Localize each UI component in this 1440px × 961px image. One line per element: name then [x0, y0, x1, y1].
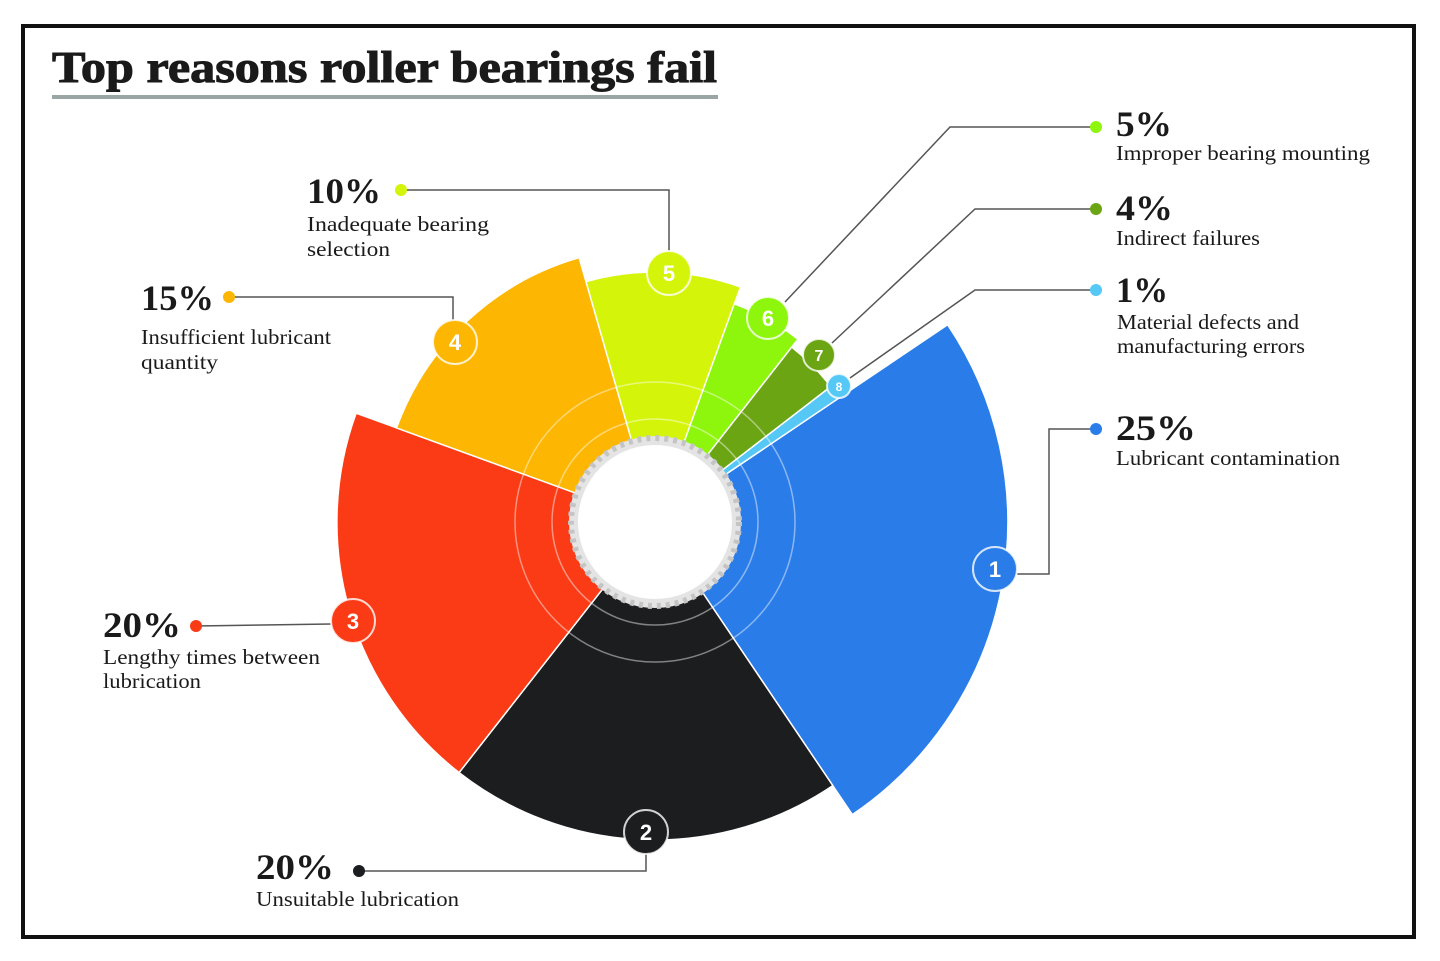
text: 2	[640, 820, 652, 845]
text: 8	[836, 380, 843, 394]
leader lines	[196, 127, 1096, 871]
label 15%: quantity	[141, 350, 219, 374]
label 25%: 25%	[1116, 408, 1196, 448]
label 4%: 4%	[1116, 188, 1173, 228]
center bearing ring	[569, 436, 741, 608]
text: 4	[449, 330, 462, 355]
segment 7: indirect failures	[655, 347, 831, 522]
text: 7	[815, 348, 824, 365]
text: 1	[989, 557, 1001, 582]
label 20% red	[103, 605, 321, 693]
polar area chart	[337, 258, 1008, 840]
text: 6	[762, 306, 774, 331]
label 15%	[141, 278, 331, 374]
label 1%: manufacturing errors	[1117, 334, 1305, 358]
label 15%: Insufficient lubricant	[141, 325, 331, 349]
label 4%	[1116, 188, 1260, 250]
text: 3	[347, 609, 359, 634]
segment 2: unsuitable lubrication	[459, 522, 833, 840]
label 1%: 1%	[1116, 270, 1168, 310]
label 1%: Material defects and	[1117, 310, 1300, 334]
label 10%	[307, 171, 490, 261]
segment 3: lengthy times	[337, 413, 655, 773]
label 5%	[1116, 104, 1371, 165]
label 20% red: 20%	[103, 605, 181, 645]
segment 1: lubricant contamination	[655, 325, 1008, 815]
label 20% red: lubrication	[103, 669, 202, 693]
dots	[190, 121, 1102, 877]
segment 5: inadequate selection	[586, 272, 740, 522]
segment 6: improper mounting	[655, 304, 798, 522]
segment 8: material defects	[655, 384, 842, 522]
label 10%: selection	[307, 237, 391, 261]
label 1%	[1116, 270, 1305, 358]
label 15%: 15%	[141, 278, 214, 318]
badges	[331, 251, 1017, 854]
text: 5	[663, 261, 675, 286]
segment 4: insufficient lubricant	[396, 258, 655, 522]
label 20% black	[256, 847, 460, 911]
label 20% black: Unsuitable lubrication	[256, 887, 460, 911]
label 25%: Lubricant contamination	[1116, 446, 1341, 470]
label 20% red: Lengthy times between	[103, 645, 321, 669]
label 5%: Improper bearing mounting	[1116, 141, 1371, 165]
label 10%: 10%	[307, 171, 381, 211]
label 5%: 5%	[1116, 104, 1172, 144]
label 25%	[1116, 408, 1341, 470]
label 20% black: 20%	[256, 847, 334, 887]
label 10%: Inadequate bearing	[307, 212, 490, 236]
title: Top reasons roller bearings fail	[52, 43, 717, 92]
label 4%: Indirect failures	[1116, 226, 1260, 250]
